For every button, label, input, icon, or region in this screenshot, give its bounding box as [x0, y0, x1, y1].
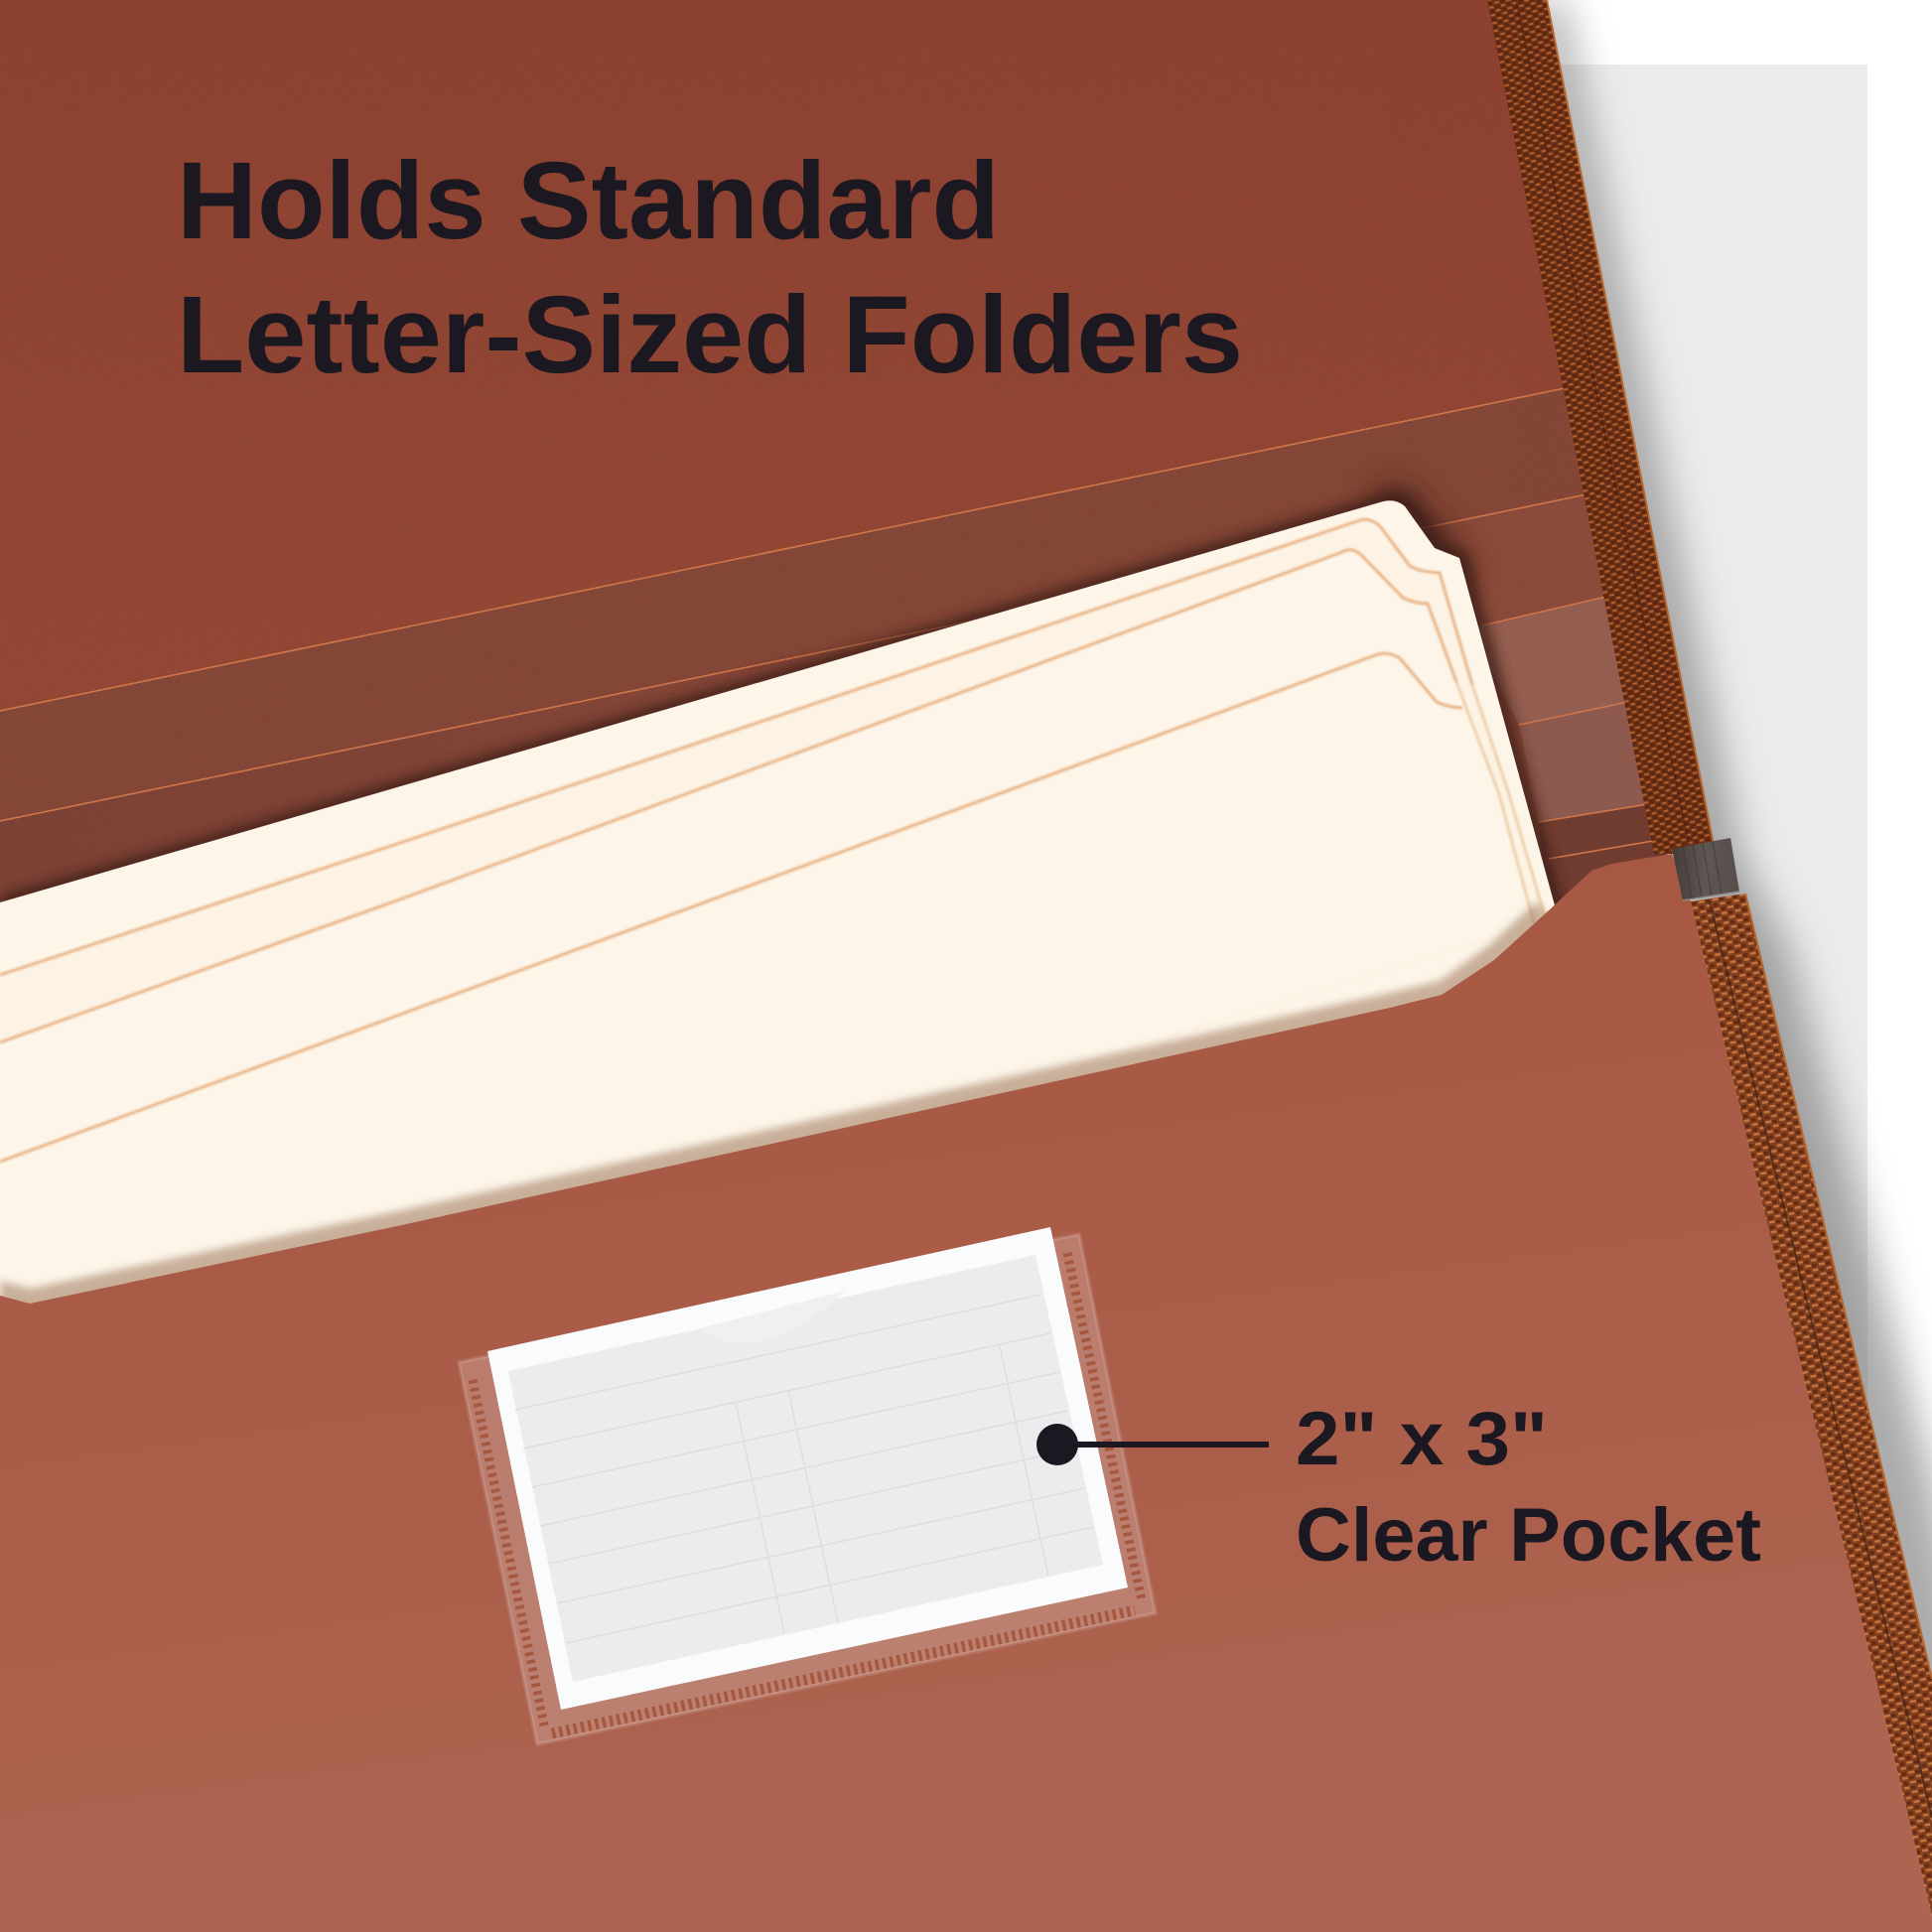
binding: upper band bright edge — [1547, 0, 1714, 845]
folder: tan edges — [0, 519, 1547, 1162]
panel: inner gusset layers — [0, 387, 1668, 1092]
binding: lower band bright edge — [1745, 894, 1932, 1679]
folder: third sheet — [0, 550, 1534, 1390]
panel: front pocket — [0, 854, 1932, 1932]
callout text: Clear Pocket — [1296, 1493, 1761, 1578]
gusset: upper strip — [0, 387, 1591, 821]
title — [177, 140, 1243, 396]
binding: upper elastic band — [1487, 0, 1714, 854]
background: gray panel — [1489, 65, 1867, 1932]
binding: upper band centre seam — [1516, 0, 1690, 849]
pocket: perforated seal bottom — [552, 1610, 1135, 1733]
callout text — [1296, 1397, 1761, 1578]
pocket: gray card grid area — [508, 1255, 1103, 1682]
icon: metal band clip — [1672, 838, 1739, 900]
callout: leader line and dot — [1036, 1424, 1269, 1465]
panel: stack of manila folders — [0, 500, 1555, 1304]
pocket: perforated seal right — [1067, 1253, 1142, 1600]
pocket: top slit shadow — [695, 1279, 824, 1307]
shadow: pocket edge over folders — [0, 901, 1549, 1315]
pocket: thumb notch arc — [700, 1291, 846, 1343]
gusset: seam lines — [0, 387, 1653, 859]
folder: second sheet — [0, 519, 1549, 1390]
panel: upper folder flap — [0, 0, 1668, 1330]
panel: clear label pocket — [459, 1227, 1156, 1744]
texture: case grain — [0, 0, 1652, 892]
binding: lower elastic band — [1691, 894, 1932, 1916]
folder: front sheet — [0, 653, 1534, 1390]
binding: lower band centre seam — [1710, 901, 1932, 1817]
pocket: perforated seal left — [473, 1380, 545, 1729]
pocket: clear sleeve — [459, 1234, 1156, 1744]
shadow: folder tab on gusset — [1365, 482, 1474, 576]
shadow: folders on gusset — [0, 482, 1565, 1291]
gusset: lit lower panel — [1519, 702, 1648, 822]
pocket: white card — [487, 1227, 1128, 1710]
gusset: light right panel — [1469, 596, 1628, 725]
pocket: card rule lines — [515, 1295, 1094, 1643]
title: Holds Standard — [177, 140, 1000, 262]
title: Letter-Sized Folders — [177, 274, 1243, 396]
shadow: binder cast shadow — [1529, 0, 1932, 1708]
gusset: bottom shaded panel — [1539, 804, 1668, 918]
folder: back sheet — [0, 500, 1555, 1440]
callout text: 2" x 3" — [1296, 1397, 1548, 1481]
gusset: lower strip — [0, 493, 1668, 1092]
